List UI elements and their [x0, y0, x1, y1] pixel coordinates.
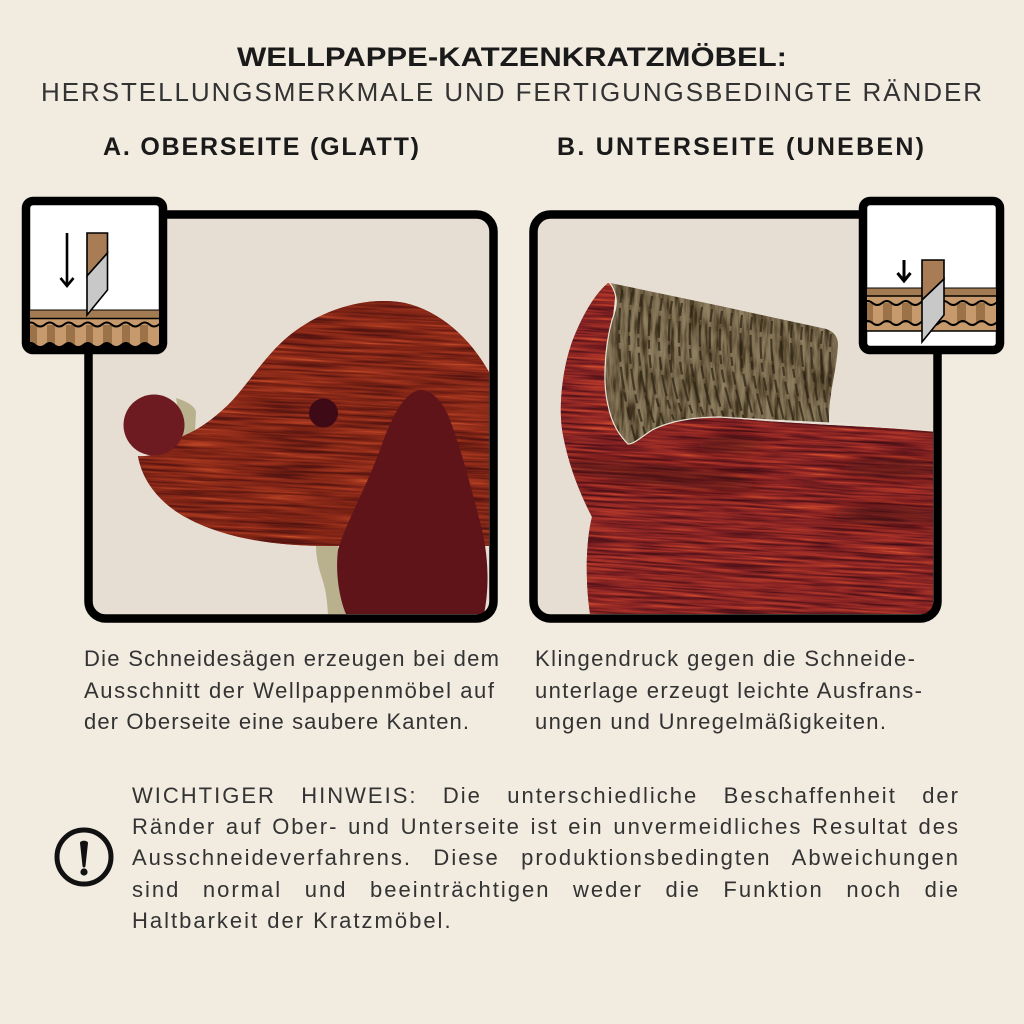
description B: [535, 646, 922, 734]
inset icon B: blade pressing through: [863, 201, 1015, 350]
description B: Klingendruck gegen die Schneide-: [535, 646, 915, 671]
heading: A. Oberseite: A. OBERSEITE (GLATT): [103, 133, 419, 161]
blade: [922, 260, 944, 342]
subtitle: HERSTELLUNGSMERKMALE UND FERTIGUNGSBEDINGTE RÄNDER: [41, 77, 982, 107]
note text: Ausschneideverfahrens. Diese produktionsbedingten Abweichungen: [132, 845, 960, 870]
blade: [87, 233, 108, 315]
note text: WICHTIGER HINWEIS: Die unterschiedliche Beschaffenheit der: [132, 783, 960, 808]
arrow down: [60, 233, 74, 286]
darker grain bands: [559, 436, 940, 525]
corrugated cross-section: [606, 283, 838, 444]
corrugated board: [30, 310, 159, 346]
panel B: uneven underside: [538, 219, 933, 614]
photo: dog body with frayed cardboard edge: [560, 283, 933, 614]
eye: [309, 398, 338, 428]
description A: Die Schneidesägen erzeugen bei dem: [84, 646, 499, 671]
panel A: smooth top side: [93, 219, 489, 614]
title: [41, 42, 982, 107]
corrugated board: [867, 288, 996, 332]
heading: B. Unterseite: B. UNTERSEITE (UNEBEN): [557, 133, 924, 161]
icon: exclamation warning: [57, 830, 111, 884]
panel B frame: [534, 214, 938, 618]
cardboard edge behind nose: [176, 398, 196, 436]
description B: unterlage erzeugt leichte Ausfrans-: [535, 678, 922, 703]
photo: dog head with clean edge: [124, 301, 489, 614]
title: WELLPAPPE-KATZENKRATZMÖBEL:: [237, 42, 787, 72]
arrow down: [898, 260, 910, 281]
inset icon A: saw cutting from above: [26, 201, 178, 350]
nose: [124, 394, 184, 456]
note text: sind normal und beeinträchtigen weder die Funktion noch die: [132, 877, 960, 902]
panel A frame: [88, 214, 494, 618]
curved flute shadows: [619, 290, 833, 442]
wood grain body: [560, 283, 933, 614]
note text: Ränder auf Ober- und Unterseite ist ein unvermeidliches Resultat des: [132, 814, 960, 839]
cardboard edge under neck: [316, 546, 347, 614]
note text: [132, 783, 960, 933]
description A: Ausschnitt der Wellpappenmöbel auf: [84, 678, 495, 703]
description B: ungen und Unregelmäßigkeiten.: [535, 709, 886, 734]
ear: [337, 390, 488, 614]
note text: Haltbarkeit der Kratzmöbel.: [132, 908, 453, 933]
description A: [84, 646, 499, 734]
frayed white edge: [605, 283, 933, 444]
wood grain head: [138, 301, 489, 546]
description A: der Oberseite eine saubere Kanten.: [84, 709, 469, 734]
